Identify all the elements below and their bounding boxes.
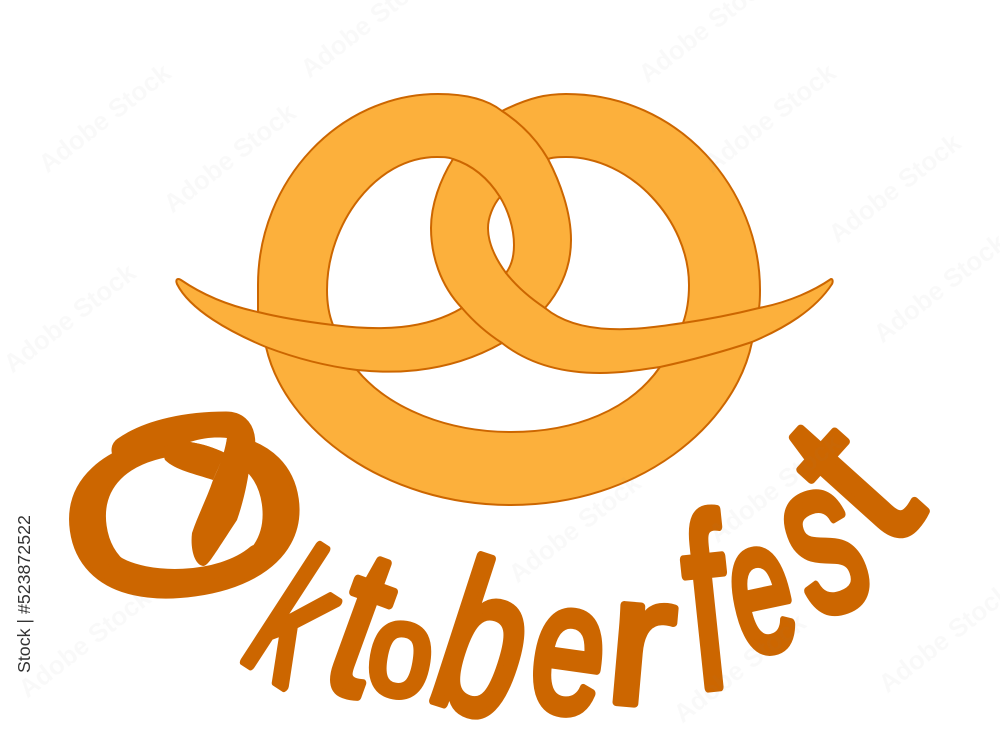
stock id label: Stock | #523872522 — [14, 515, 34, 673]
pretzel body fill and outline — [176, 94, 833, 505]
title: Oktoberfest — [40, 371, 964, 750]
letter t: t — [734, 371, 964, 587]
letter O: O — [40, 372, 329, 657]
letter e: e — [520, 540, 620, 750]
watermark: Adobe Stock — [668, 607, 812, 729]
letter r: r — [599, 535, 684, 746]
letter t: t — [302, 504, 424, 740]
pretzel — [176, 94, 833, 505]
watermark: Adobe Stock — [703, 427, 847, 549]
pretzel twist inside the O — [115, 420, 255, 576]
watermark: Adobe Stock — [823, 127, 967, 249]
letter o: o — [358, 573, 445, 727]
letter e: e — [708, 480, 811, 695]
letter s: s — [745, 409, 895, 664]
pretzel strand crossing lines — [258, 111, 759, 370]
watermark: Adobe Stock — [0, 257, 142, 379]
letter f: f — [671, 465, 742, 742]
watermark: Adobe Stock — [158, 97, 302, 219]
watermark: Adobe Stock — [33, 57, 177, 179]
watermark: Adobe Stock — [698, 57, 842, 179]
watermark: Adobe Stock — [503, 467, 647, 589]
watermark: Adobe Stock — [13, 582, 157, 704]
letter k: k — [214, 513, 378, 722]
